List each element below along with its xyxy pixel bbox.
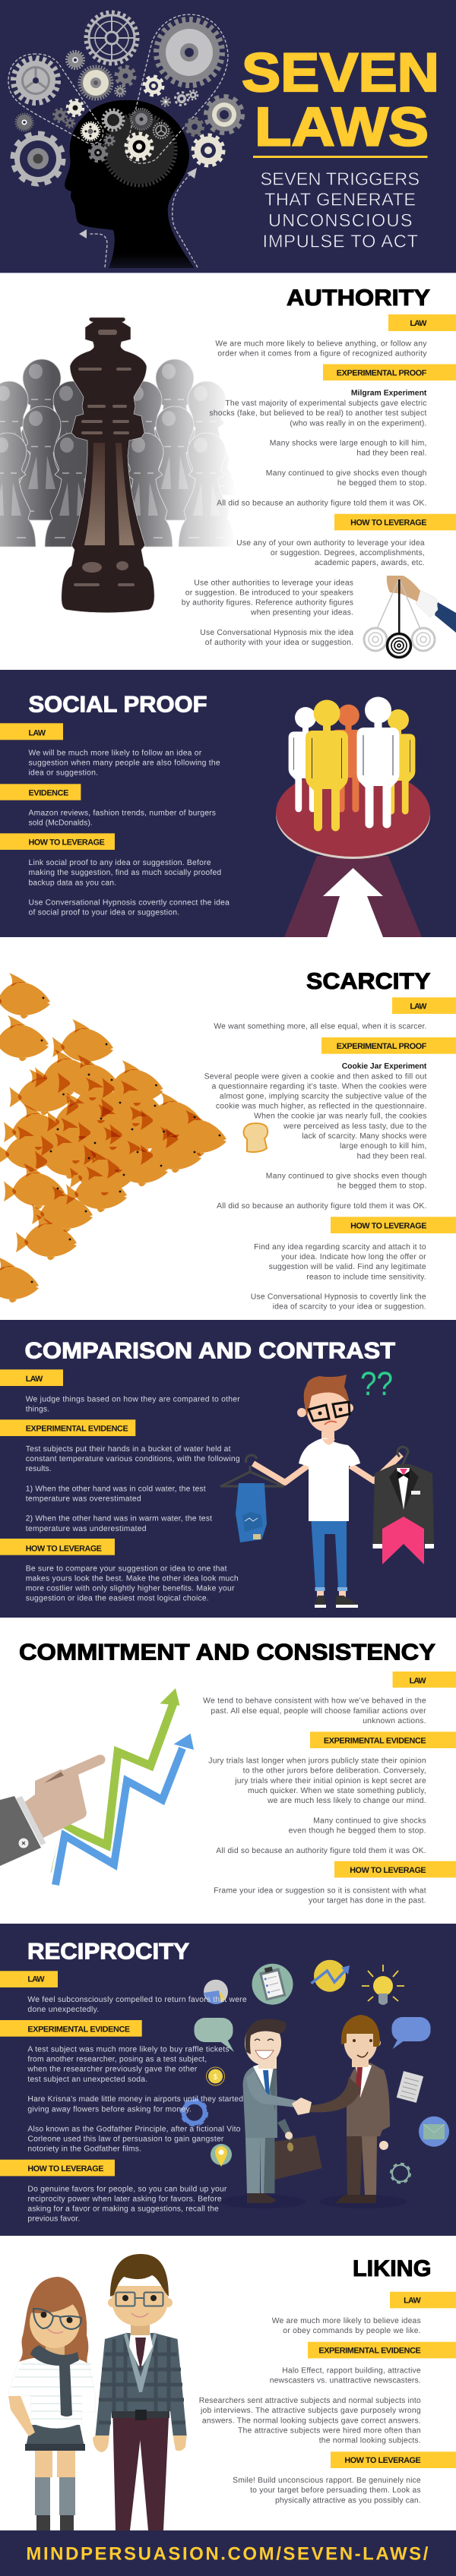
text: leverage authority: Use any of your own authority to leverage your idea <box>236 539 425 548</box>
text: law: unknown actions. <box>363 1717 426 1725</box>
text: milgram experiment <box>209 390 427 507</box>
text: evidence: The attractive subjects were hired more often than <box>238 2426 421 2435</box>
text: leverage reciprocity: reciprocity power when later asking for favors. Before <box>27 2195 222 2203</box>
label: law: LAW <box>410 1002 427 1011</box>
top spoked gear <box>87 12 137 64</box>
subtitle: THAT GENERATE <box>264 190 416 210</box>
text: milgram experiment: shocks (fake, but believed to be real) to another test subject <box>209 409 427 418</box>
heading: LIKING <box>353 2256 432 2281</box>
text: leverage reciprocity: Do genuine favors for people, so you can build up your <box>27 2185 227 2193</box>
text: cookie jar experiment: All did so because an authority figure told them it was OK. <box>217 1202 426 1211</box>
text: leverage commitment <box>214 1886 426 1905</box>
label: how to leverage <box>334 514 456 530</box>
text: evidence <box>208 1757 426 1855</box>
text: leverage reciprocity: asking for a favor or making a suggestions, recall the <box>27 2205 219 2214</box>
text: leverage authority: Use Conversational Hypnosis mix the idea <box>200 629 353 637</box>
text: cookie jar experiment: Several people were given a cookie and then asked to fill out <box>204 1072 427 1081</box>
header panel <box>0 0 456 273</box>
illustration: business icons <box>182 1960 449 2183</box>
label: evidence <box>0 784 81 800</box>
heading: COMPARISON AND CONTRAST <box>24 1338 395 1363</box>
label: how to leverage: HOW TO LEVERAGE <box>29 838 105 848</box>
label: experimental proof <box>321 1037 456 1054</box>
label: how to leverage <box>0 833 115 850</box>
text: cookie jar experiment: almost gone, implying scarcity the subjective value of the <box>220 1093 427 1101</box>
label: law <box>392 997 456 1014</box>
big gear <box>157 20 222 85</box>
woman <box>8 2277 95 2530</box>
text: evidence: Many continued to give shocks <box>313 1817 426 1825</box>
text: cookie jar experiment: Cookie Jar Experiment <box>342 1062 427 1071</box>
text: milgram experiment: The vast majority of experimental subjects gave electric <box>225 399 426 408</box>
text: law <box>272 2317 421 2335</box>
panel: commitment and consistency <box>0 1640 456 1905</box>
title: seven laws <box>242 43 439 158</box>
text: leverage scarcity: your idea. Indicate how long the offer or <box>281 1253 426 1261</box>
label: law <box>0 1369 63 1386</box>
label: how to leverage: HOW TO LEVERAGE <box>350 1221 426 1230</box>
text: evidence: All did so because an authority figure told them it was OK. <box>216 1847 426 1855</box>
footer <box>0 2530 456 2576</box>
text: milgram experiment: (who was really in on the experiment). <box>290 419 426 428</box>
subtitle <box>260 169 420 251</box>
label: how to leverage: HOW TO LEVERAGE <box>350 1866 426 1875</box>
text: evidence: newscasters vs. unattractive newscasters. <box>270 2377 421 2385</box>
label: law: LAW <box>26 1375 43 1384</box>
label: experimental evidence <box>0 1419 135 1436</box>
panel: comparison and contrast <box>0 1320 456 1618</box>
text: law <box>203 1697 426 1725</box>
text: cookie jar experiment: Many continued to give shocks even though <box>266 1173 427 1181</box>
text: law: We will be much more likely to follow an idea or <box>29 750 202 758</box>
label: law <box>388 314 456 331</box>
text: evidence: Amazon reviews, fashion trends, number of burgers <box>29 809 216 817</box>
text: leverage authority: when presenting your ideas. <box>250 609 353 617</box>
panel: authority <box>0 286 456 658</box>
label: law <box>0 723 63 740</box>
text: leverage liking: to your target before persuading them. Look as <box>250 2486 421 2495</box>
subtitle: SEVEN TRIGGERS <box>260 169 420 188</box>
text: leverage scarcity: Find any idea regarding scarcity and attach it to <box>254 1243 426 1252</box>
icon: jeans on hanger <box>221 1455 283 1542</box>
text: evidence: much quicker. When we state something publicly, <box>248 1787 426 1795</box>
text: leverage reciprocity: previous favor. <box>27 2215 80 2224</box>
text: leverage liking: Smile! Build unconscious rapport. Be genuinely nice <box>233 2477 421 2485</box>
text: evidence: from another researcher, posing as a test subject, <box>27 2056 207 2064</box>
text: leverage authority: Use other authorities to leverage your ideas <box>194 579 353 587</box>
text: law <box>215 339 427 358</box>
illustration: man choosing between jeans and tuxedo <box>221 1365 434 1608</box>
text: evidence: Hare Krisna's made little money in airports until they started <box>27 2095 243 2104</box>
text: cookie jar experiment: were perceived as less tasty, due to the <box>283 1122 427 1131</box>
heading: SCARCITY <box>306 969 430 994</box>
text: leverage authority: academic papers, awards, etc. <box>315 559 425 567</box>
text: evidence: notoriety in the Godfather films. <box>27 2145 141 2154</box>
text: law <box>29 750 220 778</box>
text: evidence: Researchers sent attractive subjects and normal subjects into <box>199 2397 421 2405</box>
text: cookie jar experiment: had they been real. <box>357 1152 426 1160</box>
text: milgram experiment: he begged them to stop. <box>337 479 426 488</box>
text: leverage social proof: Use Conversational Hypnosis covertly connect the idea <box>29 898 230 907</box>
text: leverage authority: of authority with your idea or suggestion. <box>205 639 353 647</box>
text: leverage scarcity: idea of scarcity to your idea or suggestion. <box>273 1303 426 1312</box>
label: experimental evidence: EXPERIMENTAL EVIDENCE <box>26 1425 128 1434</box>
title: seven laws: SEVEN <box>242 43 439 103</box>
panel: social proof <box>0 670 456 937</box>
illustration: business icons: $ <box>213 2073 217 2082</box>
text: evidence: giving away flowers before asking for money. <box>27 2105 192 2114</box>
label: how to leverage <box>331 1217 456 1233</box>
text: cookie jar experiment: lack of scarcity. Many shocks were <box>302 1132 427 1141</box>
text: leverage authority: by authority figures. Reference authority figures <box>182 599 353 608</box>
text: law: We feel subconsciously compelled to return favors that were <box>27 1996 247 2004</box>
text: law: done unexpectedly. <box>27 2006 99 2014</box>
illustration: two men shaking hands <box>220 2015 407 2208</box>
subtitle: UNCONSCIOUS <box>268 210 412 230</box>
text: leverage commitment: Frame your idea or suggestion so it is consistent with what <box>214 1886 426 1895</box>
label: how to leverage <box>331 2451 456 2468</box>
text: law: order when it comes from a figure of recognized authority <box>217 349 427 358</box>
text: evidence: the normal looking subjects. <box>319 2436 421 2445</box>
text: cookie jar experiment: When the cookie jar was nearly full, the cookies <box>254 1113 426 1121</box>
label: how to leverage <box>0 1539 115 1555</box>
text: leverage authority: or suggestion. Be introduced to your speakers <box>185 589 353 597</box>
text: cookie jar experiment: cookie was much higher, as reflected in the questionnaire. <box>216 1103 426 1111</box>
text: leverage scarcity: reason to include time sensitivity. <box>306 1273 426 1281</box>
panel: liking <box>8 2254 456 2530</box>
text: law: We tend to behave consistent with how we've behaved in the <box>203 1697 426 1706</box>
icon: bread slice <box>243 1123 268 1152</box>
text: evidence <box>29 809 216 827</box>
title: seven laws: LAWS <box>255 97 429 158</box>
label: law: LAW <box>29 728 46 737</box>
text: law: or obey commands by people we like. <box>283 2327 421 2335</box>
text: evidence: temperature was underestimated <box>26 1525 147 1533</box>
label: experimental proof <box>323 365 456 380</box>
text: leverage scarcity <box>251 1243 426 1312</box>
label: experimental proof: EXPERIMENTAL PROOF <box>337 1042 427 1051</box>
text: leverage comparison <box>26 1565 239 1603</box>
text: law: We want something more, all else equal, when it is scarcer. <box>214 1023 426 1031</box>
text: law: idea or suggestion. <box>29 769 98 778</box>
text: evidence: when the researcher previously gave the other <box>27 2066 198 2074</box>
illustration: crowd on platform with arrow <box>276 697 430 937</box>
text: law <box>27 1996 247 2014</box>
text: leverage scarcity: suggestion will be valid. Find any legitimate <box>269 1263 426 1271</box>
label: how to leverage: HOW TO LEVERAGE <box>350 519 426 528</box>
label: experimental evidence <box>310 1732 456 1748</box>
text: leverage scarcity: Use Conversational Hypnosis to covertly link the <box>251 1293 426 1302</box>
text: milgram experiment: had they been real. <box>356 450 426 458</box>
text: law <box>26 1395 240 1413</box>
text: law: past. All else equal, people will choose familiar actions over <box>211 1707 426 1716</box>
text: evidence: sold (McDonalds). <box>29 819 93 827</box>
text: evidence: Test subjects put their hands in a bucket of water held at <box>26 1445 231 1454</box>
text: milgram experiment: Many shocks were large enough to kill him, <box>270 440 426 448</box>
text: leverage comparison: suggestion or idea the easiest most logical choice. <box>26 1595 209 1603</box>
text: law: We are much more likely to believe anything, or follow any <box>215 339 427 348</box>
label: experimental evidence <box>0 2020 142 2037</box>
icon: tuxedo on hanger <box>372 1447 434 1564</box>
text: evidence: temperature was overestimated <box>26 1495 141 1503</box>
label: law <box>0 1971 58 1987</box>
illustration: couple <box>8 2254 187 2530</box>
text: leverage comparison: makes yours look the best. Make the other idea look much <box>26 1575 239 1583</box>
text: evidence: Corleone used this law of persuasion to gain gangster <box>27 2136 224 2144</box>
text: evidence: A test subject was much more likely to buy raffle tickets <box>27 2046 230 2054</box>
icon: hand with pendulum <box>364 576 456 658</box>
text: evidence: even though he begged them to stop. <box>289 1826 426 1835</box>
label: experimental evidence: EXPERIMENTAL EVIDENCE <box>324 1737 426 1746</box>
text: evidence: answers. The normal looking subjects gave correct answers. <box>202 2417 421 2425</box>
text: leverage social proof: making the suggestion, find as much socially proofed <box>29 869 221 877</box>
text: leverage liking <box>233 2477 421 2505</box>
label: experimental evidence <box>308 2342 456 2358</box>
text: cookie jar experiment: large enough to kill him, <box>340 1142 426 1151</box>
text: leverage authority: or suggestion. Degrees, accomplishments, <box>271 549 425 557</box>
text: evidence: test subject an unexpected soda. <box>27 2076 147 2084</box>
text: evidence: 2) When the other hand was in warm water, the test <box>26 1515 212 1523</box>
text: milgram experiment: Many continued to give shocks even though <box>266 469 427 478</box>
label: law: LAW <box>404 2297 421 2306</box>
footer url: MINDPERSUASION.COM/SEVEN-LAWS/ <box>26 2544 429 2565</box>
text: leverage social proof: Link social proof to any idea or suggestion. Before <box>29 859 211 867</box>
text: cookie jar experiment: he begged them to stop. <box>337 1182 426 1191</box>
label: how to leverage: HOW TO LEVERAGE <box>27 2164 103 2174</box>
label: law <box>393 1672 456 1687</box>
text: evidence: jury trials where their initial opinion is kept secret are <box>234 1777 426 1785</box>
label: experimental evidence: EXPERIMENTAL EVIDENCE <box>27 2025 130 2034</box>
left gear <box>14 58 58 103</box>
heading: AUTHORITY <box>287 286 430 311</box>
subtitle: IMPULSE TO ACT <box>263 231 418 251</box>
text: evidence: constant temperature various conditions, with the following <box>26 1455 240 1463</box>
text: milgram experiment: All did so because an authority figure told them it was OK. <box>217 499 426 507</box>
text: evidence <box>26 1445 240 1533</box>
heading: SOCIAL PROOF <box>29 692 207 717</box>
text: leverage social proof: backup data as you can. <box>29 879 116 887</box>
label: law: LAW <box>410 319 427 328</box>
illustration: school of fish <box>0 973 226 1302</box>
text: law: We judge things based on how they are compared to other <box>26 1395 240 1403</box>
man <box>93 2254 187 2530</box>
text: cookie jar experiment <box>204 1062 427 1211</box>
heading: COMMITMENT AND CONSISTENCY <box>19 1640 435 1665</box>
label: evidence: EVIDENCE <box>29 788 68 797</box>
label: law: LAW <box>27 1975 45 1984</box>
text: evidence: Jury trials last longer when jurors publicly state their opinion <box>208 1757 426 1766</box>
text: leverage comparison: Be sure to compare your suggestion or idea to one that <box>26 1565 227 1574</box>
label: how to leverage: HOW TO LEVERAGE <box>344 2456 421 2465</box>
text: law: We are much more likely to believe ideas <box>272 2317 421 2325</box>
text: leverage authority <box>182 539 425 647</box>
label: experimental evidence: EXPERIMENTAL EVIDENCE <box>318 2347 421 2356</box>
illustration: hand pointing at rising arrows <box>0 1688 194 1885</box>
text: evidence: we are much less likely to change our mind. <box>267 1797 426 1805</box>
label: how to leverage: HOW TO LEVERAGE <box>26 1544 102 1553</box>
text: law: suggestion when many people are also following the <box>29 759 220 768</box>
text: evidence: Halo Effect, rapport building, attractive <box>282 2367 421 2376</box>
illustration: pawns and king <box>0 317 236 613</box>
label: how to leverage <box>0 2160 115 2176</box>
text: leverage commitment: your target has done in the past. <box>309 1896 426 1905</box>
icon: head silhouette with gears <box>8 12 242 268</box>
text: evidence <box>27 2046 243 2154</box>
text: evidence: results. <box>26 1465 52 1473</box>
label: law <box>390 2292 456 2308</box>
panel: scarcity <box>0 969 456 1312</box>
icon: question marks: ?? <box>360 1365 393 1403</box>
text: cookie jar experiment: a questionnaire regarding it's taste. When the cookies were <box>212 1082 427 1091</box>
text: leverage reciprocity <box>27 2185 227 2224</box>
text: evidence: 1) When the other hand was in cold water, the test <box>26 1485 206 1493</box>
label: experimental proof: EXPERIMENTAL PROOF <box>337 369 427 378</box>
text: leverage liking: physically attractive as you possibly can. <box>275 2496 421 2505</box>
text: evidence: job interviews. The attractive subjects gave purposely wrong <box>200 2407 421 2415</box>
heading: RECIPROCITY <box>27 1940 189 1964</box>
text: evidence <box>199 2367 421 2445</box>
text: evidence: Also known as the Godfather Principle, after a fictional Vito <box>27 2126 241 2134</box>
panel: reciprocity <box>0 1924 456 2236</box>
text: evidence: to the other jurors before deliberation. Conversely, <box>243 1767 426 1776</box>
text: leverage comparison: more costlier with only slightly higher benefits. Make your <box>26 1585 235 1593</box>
text: milgram experiment: Milgram Experiment <box>351 390 427 398</box>
text: leverage social proof <box>29 859 230 917</box>
text: leverage social proof: of social proof to your idea or suggestion. <box>29 909 179 917</box>
label: law: LAW <box>410 1677 426 1686</box>
text: law: things. <box>26 1405 49 1413</box>
label: how to leverage <box>334 1861 456 1877</box>
